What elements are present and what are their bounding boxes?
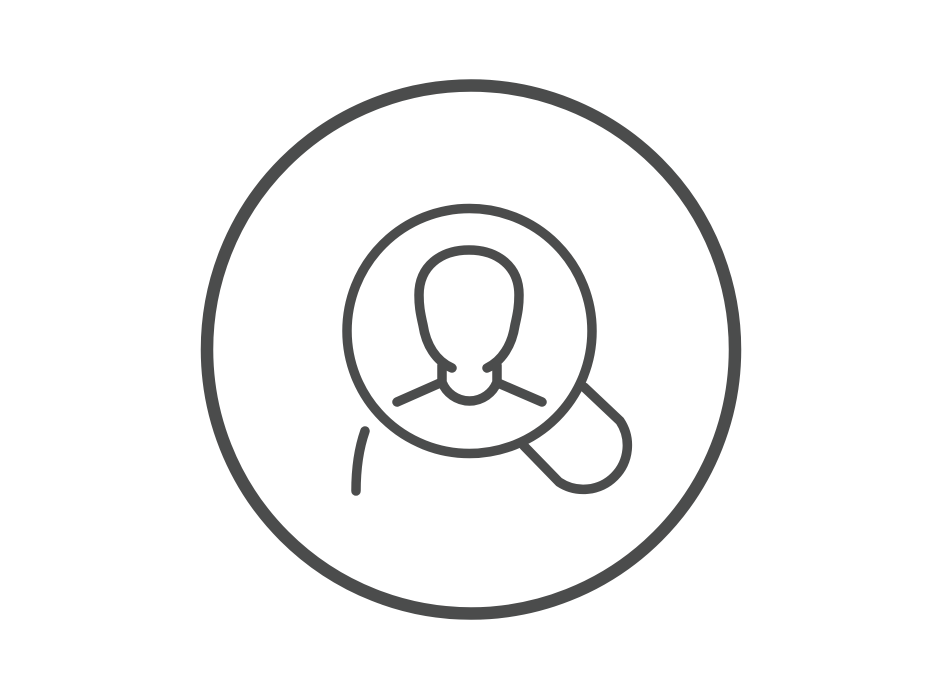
magnifier handle [524,387,627,489]
magnifier lens [347,208,592,454]
highlight arc [356,431,365,491]
outer circle [207,86,735,614]
right shoulder [498,383,542,402]
left shoulder [397,383,440,402]
person head [419,250,519,368]
person neck [442,365,497,401]
